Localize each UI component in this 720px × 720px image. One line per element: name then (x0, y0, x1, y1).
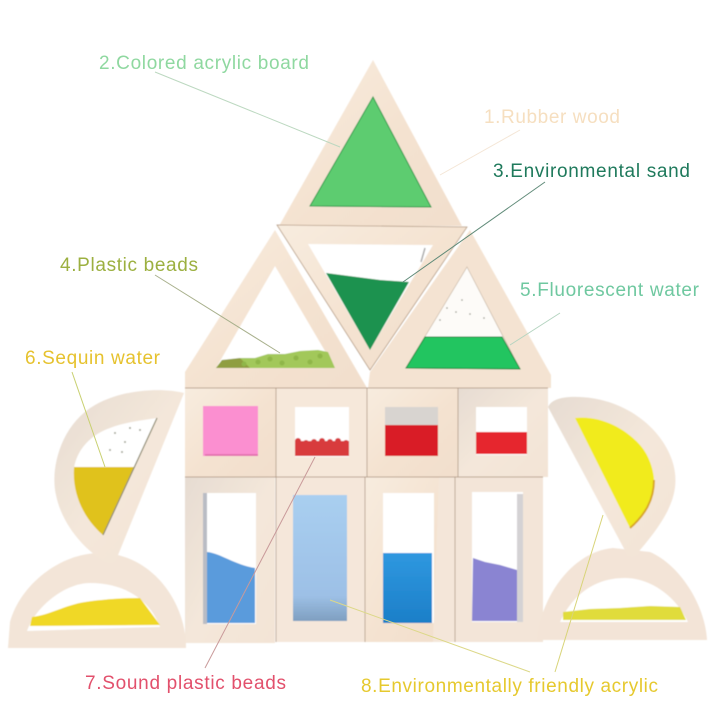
leader lines (72, 72, 603, 672)
block: top triangle with colored acrylic (279, 60, 462, 226)
label: 6 sequin water: 6.Sequin water (25, 348, 161, 369)
label: 2 colored acrylic board: 2.Colored acrylic board (99, 53, 309, 74)
toy blocks (8, 60, 707, 648)
block: tilted half-circle with yellow acrylic (548, 397, 675, 556)
label: 8 environmentally friendly acrylic: 8.Environmentally friendly acrylic (361, 676, 658, 697)
block: left triangle with plastic beads (185, 230, 367, 388)
block: tall light-blue acrylic (276, 477, 365, 642)
label: 5 fluorescent water: 5.Fluorescent water (520, 280, 700, 301)
block: tilted half-circle with sequin water (54, 390, 184, 563)
block: bottom-right half-circle with yellow beads (537, 548, 707, 640)
block: upper square pink (185, 388, 276, 477)
label: 1 rubber wood: 1.Rubber wood (484, 107, 620, 128)
block: tall blue sand (185, 477, 275, 643)
block: bottom-left half-circle with yellow sand (8, 553, 186, 648)
label: 4 plastic beads: 4.Plastic beads (60, 255, 198, 276)
block: upper square red water (458, 388, 548, 477)
label: 3 environmental sand: 3.Environmental sand (493, 161, 690, 182)
block: tall purple beads (455, 477, 543, 642)
block: upper square red beads (276, 388, 367, 477)
label: 7 sound plastic beads: 7.Sound plastic beads (85, 673, 286, 694)
block seams (185, 388, 548, 642)
block: inverted triangle with environmental sand (277, 225, 467, 370)
block: tall blue water (365, 477, 455, 642)
block: upper square red sequin water (367, 388, 458, 477)
block: right triangle with fluorescent water (368, 230, 551, 388)
